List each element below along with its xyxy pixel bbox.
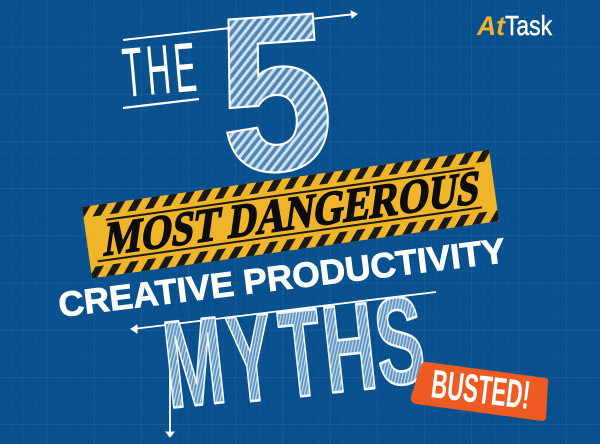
heading: MYTHS: T [273,284,329,425]
heading: THE: THE [119,27,203,112]
banner: hazard tape [82,150,499,278]
badge: BUSTED! [411,362,548,421]
heading: MYTHS: H [316,277,382,420]
heading: MYTHS: Y [221,288,280,430]
arrow: myths rules [131,292,436,437]
heading: MYTHS: M [157,291,231,435]
heading: MYTHS: S [368,270,431,413]
logo: AtTask: Task [505,10,553,41]
inner rule top [106,167,475,221]
banner text: MOST DANGEROUS [101,161,483,267]
logo: AtTask: At [476,11,506,41]
logo: AtTask [476,10,553,41]
rule under THE [123,99,199,108]
hazard stripes bottom [90,210,499,278]
hazard stripes top [82,150,491,218]
arrow: top rule [123,11,357,40]
inner rule bottom [98,206,482,262]
heading: CREATIVE PRODUCTIVITY: CREATIVE PRODUCTIVITY [56,231,508,325]
heading: MYTHS [157,270,431,435]
tape body [82,150,499,278]
